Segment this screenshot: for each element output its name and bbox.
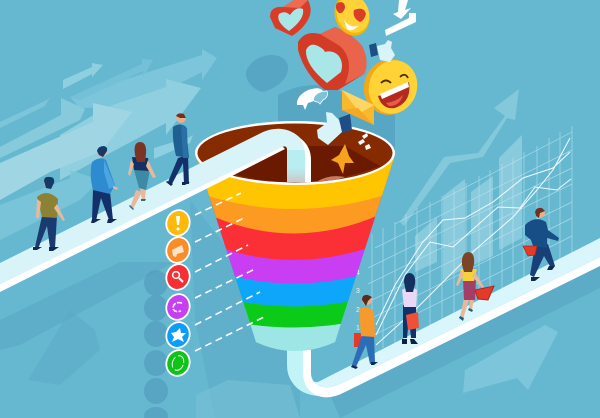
icon: green cycle bbox=[163, 347, 193, 379]
icon: yellow alert bbox=[163, 207, 193, 239]
person: woman in lilac blouse with bag bbox=[402, 273, 419, 344]
background: light shape lower centre bbox=[196, 380, 300, 418]
funnel bottom lip over the stem bbox=[253, 332, 338, 351]
person: man in olive shirt bbox=[33, 177, 65, 251]
icon: download tray bbox=[385, 0, 416, 36]
background: shadow ovals under the icons bbox=[144, 270, 168, 418]
icon: blue star bbox=[163, 319, 193, 351]
icon: envelope bbox=[342, 90, 374, 125]
funnel: inner floor shading bbox=[228, 146, 380, 182]
icon: thumb up over funnel bbox=[317, 112, 352, 145]
funnel: light floor patch bbox=[318, 176, 345, 181]
funnel: colour bands bbox=[197, 155, 395, 351]
chart: bars, growth arrow and grid bbox=[356, 89, 572, 354]
icon: orange megaphone bbox=[163, 234, 193, 266]
background: light arrow shape lower right bbox=[463, 325, 558, 393]
person: woman in yellow top with basket bbox=[456, 252, 494, 321]
person: man in dark jacket on left walkway bbox=[166, 113, 190, 186]
icon: purple magnet bbox=[163, 291, 193, 323]
dashed connectors from icons to funnel bands bbox=[195, 193, 264, 351]
icon: small heart bbox=[270, 0, 311, 36]
icon: big heart bbox=[298, 27, 367, 90]
person: man in blue jacket bbox=[91, 146, 118, 223]
chart: axis numbers: 1 bbox=[356, 325, 360, 332]
icon: small white marks bbox=[358, 133, 371, 150]
icon: heart eyes emoji bbox=[329, 0, 375, 41]
icon: red magnifier bbox=[163, 261, 193, 293]
icon: thumb up top bbox=[369, 40, 395, 62]
chart: axis numbers: 2 bbox=[356, 307, 360, 314]
chart: axis numbers bbox=[356, 270, 360, 332]
icon: laughing emoji bbox=[357, 52, 424, 122]
funnel stem and outflow to right walkway bbox=[287, 238, 600, 397]
funnel: dark interior bbox=[198, 124, 392, 182]
person: man in orange top with bag bbox=[351, 295, 378, 369]
background: rising arrows top left bbox=[0, 49, 217, 240]
chart: axis numbers: 4 bbox=[356, 270, 360, 277]
icon: chat bubbles bbox=[297, 88, 328, 110]
left walkway entering the funnel bbox=[0, 129, 311, 292]
chart: axis numbers: 3 bbox=[356, 288, 360, 295]
person: woman in navy top bbox=[128, 142, 156, 210]
icon: star bbox=[331, 144, 354, 174]
funnel bbox=[195, 121, 395, 351]
person: man in navy suit with basket bbox=[523, 208, 559, 281]
funnel: white rim bbox=[195, 121, 395, 185]
